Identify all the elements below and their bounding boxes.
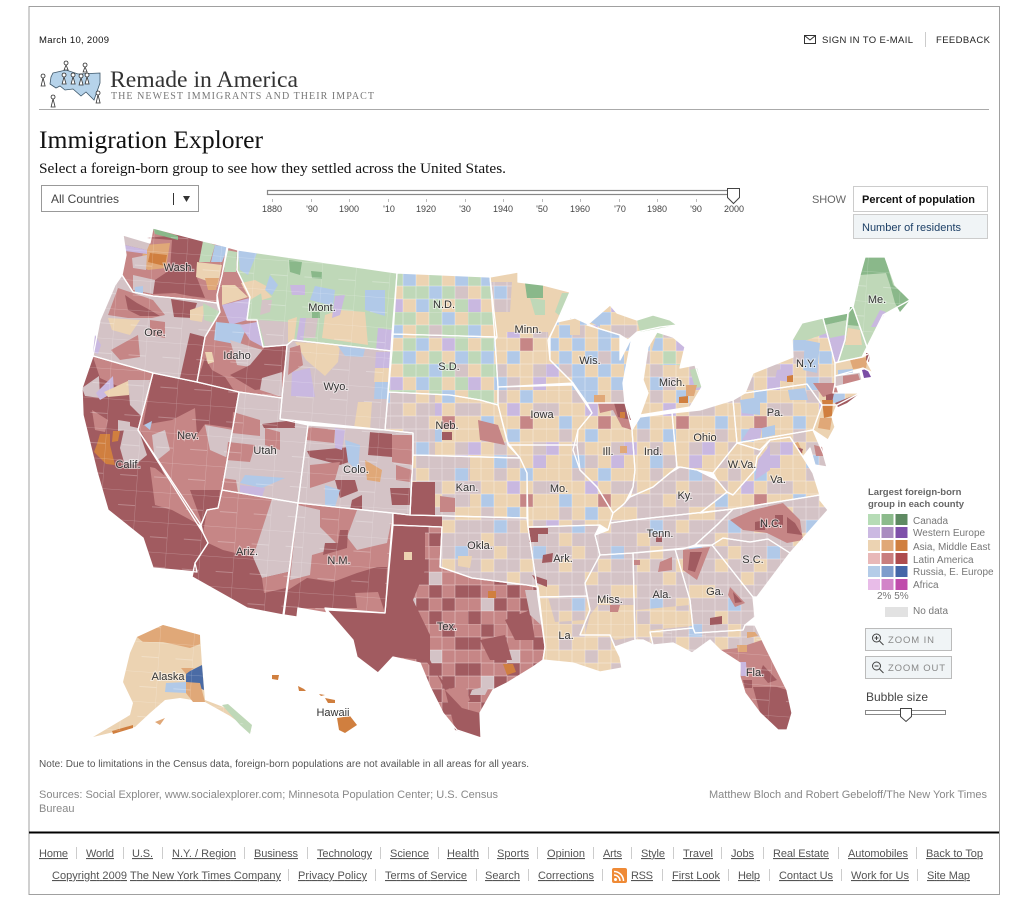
utility links (804, 32, 991, 47)
state labels: Wis. (579, 355, 601, 367)
state: South Carolina (712, 538, 790, 597)
legend: Western Europe (913, 528, 986, 539)
year slider: 1900 (339, 204, 359, 214)
footer navigation: Home (39, 848, 68, 860)
state labels: Miss. (597, 594, 623, 606)
legend: Canada (913, 516, 948, 527)
icon: RSS (612, 868, 627, 883)
state labels: Okla. (467, 540, 493, 552)
state labels: Neb. (435, 420, 459, 432)
utility links: SIGN IN TO E-MAIL (822, 35, 913, 46)
bubble size slider: Bubble size (866, 690, 928, 704)
state labels: W.Va. (728, 459, 756, 471)
state labels: N.D. (433, 299, 455, 311)
state: Washington (122, 228, 228, 303)
header title: Remade in America (110, 67, 298, 92)
Hawaii (272, 675, 357, 733)
state: Wyoming (280, 340, 392, 430)
utility links: FEEDBACK (936, 35, 991, 46)
year slider: '30 (459, 204, 471, 214)
state labels: N.M. (327, 555, 351, 567)
state labels: Ariz. (236, 546, 258, 558)
footer navigation: Terms of Service (385, 870, 467, 882)
footer navigation: World (86, 848, 114, 860)
footer navigation: Arts (603, 848, 622, 860)
footer navigation: Health (447, 848, 479, 860)
state: Nebraska (385, 392, 520, 458)
year slider: 1940 (493, 204, 513, 214)
state labels: Wash. (164, 262, 194, 274)
dropdown: country selector: All Countries (51, 192, 119, 206)
state: Mississippi (580, 553, 635, 647)
state labels: S.D. (438, 361, 460, 373)
state: New York (745, 318, 860, 407)
state labels: S.C. (742, 554, 764, 566)
year slider: 1980 (647, 204, 667, 214)
state: Montana (237, 250, 397, 351)
state: New Mexico (284, 503, 393, 617)
state: Idaho (197, 247, 287, 398)
footer navigation: Automobiles (848, 848, 908, 860)
dropdown: country selector (42, 186, 198, 212)
state labels (115, 262, 886, 719)
year slider: 1880 (262, 204, 282, 214)
state: Illinois (573, 403, 635, 513)
state: Arizona (192, 490, 298, 615)
footer navigation: N.Y. / Region (172, 848, 236, 860)
footer navigation: Travel (683, 848, 713, 860)
state: Ohio (672, 400, 737, 473)
state labels: Ala. (653, 589, 671, 601)
state labels: La. (558, 630, 574, 642)
year slider: 2000 (724, 204, 744, 214)
state: California (82, 356, 208, 572)
subheading: Select a foreign-born group to see how they settled across the United States. (39, 161, 506, 177)
date: March 10, 2009 (39, 35, 109, 46)
sources: Bureau (39, 803, 74, 815)
footer navigation: The New York Times Company (130, 870, 282, 882)
legend: Latin America (913, 555, 974, 566)
state: South Dakota (388, 334, 498, 405)
footer navigation: RSS (631, 870, 653, 882)
state labels: Iowa (530, 409, 554, 421)
state labels: Colo. (343, 464, 369, 476)
state: Missouri (508, 445, 613, 530)
state labels: Ark. (553, 553, 573, 565)
map: foreign-born groups by county (82, 228, 910, 738)
state labels: Mich. (659, 377, 685, 389)
state: Colorado (298, 425, 413, 515)
state labels: Wyo. (324, 381, 348, 393)
note: Note: Due to limitations in the Census data, foreign-born populations are not available in all areas for all years. (39, 759, 529, 770)
state: Virginia (700, 437, 820, 513)
footer navigation: Real Estate (773, 848, 829, 860)
state labels: Hawaii (316, 707, 350, 719)
legend: Russia, E. Europe (913, 567, 994, 578)
state labels: N.C. (760, 518, 782, 530)
state: Vermont (823, 313, 848, 363)
state: Utah (222, 392, 308, 503)
state: Kentucky (610, 467, 733, 523)
year slider: '70 (614, 204, 626, 214)
state: Tennessee (595, 509, 733, 555)
state labels: Ky. (677, 490, 693, 502)
year slider (262, 188, 744, 214)
state labels: N.Y. (796, 358, 816, 370)
year slider: 1920 (416, 204, 436, 214)
state labels: Ohio (693, 432, 717, 444)
show toggle: SHOW (812, 194, 847, 206)
state: Georgia (675, 545, 755, 633)
footer navigation: Privacy Policy (298, 870, 368, 882)
state: Louisiana (538, 596, 622, 672)
state: Alabama (633, 549, 693, 645)
footer navigation: Style (641, 848, 665, 860)
year slider: 1960 (570, 204, 590, 214)
state: Massachusetts (835, 353, 873, 376)
state: Maryland and Delaware (737, 430, 827, 467)
state labels: Tenn. (647, 528, 673, 540)
sources (39, 789, 498, 815)
state labels: Idaho (223, 350, 251, 362)
show toggle: Number of residents (862, 222, 962, 234)
state: Florida (650, 625, 792, 730)
state labels: Calif. (115, 459, 141, 471)
state labels: Ind. (644, 446, 662, 458)
footer navigation: Help (738, 870, 760, 882)
zoom out button: ZOOM OUT (888, 663, 945, 674)
state labels: Alaska (151, 671, 185, 683)
footer navigation: U.S. (132, 848, 153, 860)
zoom in button (866, 628, 952, 650)
footer navigation: Contact Us (779, 870, 834, 882)
icon: envelope (804, 36, 816, 44)
state: Connecticut and Rhode Island (835, 369, 871, 387)
icon: Remade in America logo (41, 61, 100, 107)
state: North Carolina (695, 495, 828, 553)
footer navigation: Back to Top (926, 848, 983, 860)
state labels: Tex. (437, 621, 457, 633)
footer navigation: Search (485, 870, 520, 882)
header subtitle: THE NEWEST IMMIGRANTS AND THEIR IMPACT (111, 91, 374, 102)
state: Texas (327, 525, 545, 738)
legend: group in each county (868, 499, 965, 510)
state: Indiana (630, 413, 677, 497)
state labels: Pa. (767, 407, 783, 419)
state: Arkansas (528, 525, 600, 597)
footer navigation: Sports (497, 848, 530, 860)
state labels: Nev. (177, 430, 199, 442)
state: Kansas (410, 455, 527, 518)
footer navigation: First Look (672, 870, 720, 882)
state labels: Fla. (746, 667, 764, 679)
bubble size slider (866, 690, 946, 722)
year slider: '90 (306, 204, 318, 214)
footer navigation: Corrections (538, 870, 594, 882)
state: Oregon (93, 275, 220, 382)
sources: Sources: Social Explorer, www.socialexplorer.com; Minnesota Population Center; U.S. Census (39, 789, 498, 801)
footer navigation: Work for Us (851, 870, 910, 882)
zoom out button (866, 656, 952, 678)
year slider: '90 (690, 204, 702, 214)
footer navigation: Business (254, 848, 298, 860)
state: West Virginia (713, 440, 770, 495)
footer navigation: Site Map (927, 870, 970, 882)
show toggle: Percent of population (862, 194, 975, 206)
year slider: '50 (536, 204, 548, 214)
legend: No data (913, 606, 948, 617)
footer navigation (39, 847, 983, 882)
state labels: Utah (253, 445, 277, 457)
Alaska (93, 625, 252, 737)
year slider: '10 (383, 204, 395, 214)
footer navigation: Science (390, 848, 429, 860)
credit: Matthew Bloch and Robert Gebeloff/The New York Times (709, 789, 988, 801)
state: New Hampshire (838, 307, 867, 362)
footer navigation: Opinion (547, 848, 585, 860)
state: Michigan upper peninsula (587, 305, 677, 340)
state labels: Ore. (144, 327, 166, 339)
state labels: Mo. (550, 483, 568, 495)
state labels: Va. (770, 474, 786, 486)
state labels: Mont. (308, 302, 336, 314)
state labels: Me. (868, 294, 886, 306)
footer navigation: Technology (317, 848, 372, 860)
show toggle (812, 186, 988, 238)
state: Maine (853, 257, 910, 347)
state labels: Ill. (602, 446, 614, 458)
state: Iowa (498, 385, 592, 445)
state: Nevada (138, 373, 239, 525)
state: New Jersey (813, 400, 837, 440)
legend: Largest foreign-born (868, 487, 962, 498)
state labels: Kan. (456, 482, 478, 494)
state: Minnesota (490, 272, 573, 387)
state labels: Ga. (706, 586, 724, 598)
state: Pennsylvania (733, 384, 822, 443)
zoom in button: ZOOM IN (888, 635, 934, 646)
legend: 2% 5% (877, 591, 909, 602)
footer navigation: Copyright 2009 (52, 870, 127, 882)
heading: Immigration Explorer (39, 127, 264, 154)
legend (868, 487, 994, 617)
footer navigation: Jobs (731, 848, 754, 860)
legend: Africa (913, 580, 939, 591)
state: North Dakota (392, 273, 497, 337)
state: Wisconsin (550, 318, 632, 403)
county lines and state borders (82, 228, 910, 738)
state: Michigan lower peninsula (640, 332, 702, 415)
legend: Asia, Middle East (913, 542, 990, 553)
state: Oklahoma (393, 513, 537, 587)
state labels: Minn. (515, 324, 541, 336)
